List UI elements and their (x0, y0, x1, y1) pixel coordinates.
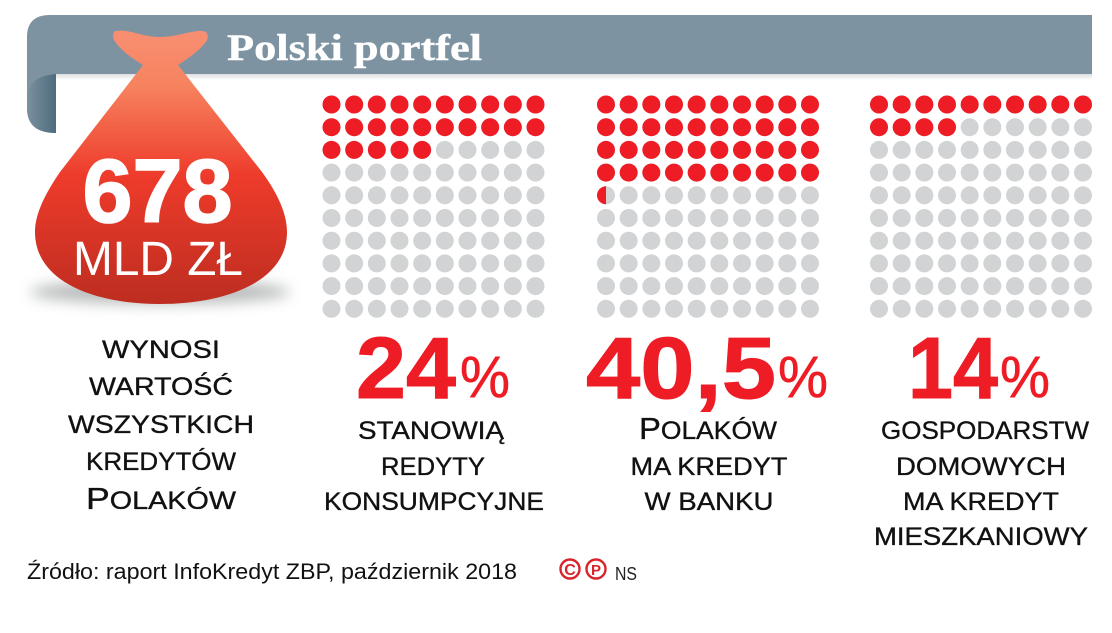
copyright icons (560, 560, 606, 579)
caption 14%: DOMOWYCH (896, 453, 1066, 481)
caption 24% (324, 417, 544, 516)
copyright icons: C (564, 562, 576, 579)
stat 14%: 14 (908, 320, 998, 417)
caption 14% (874, 417, 1089, 551)
money bag (30, 31, 290, 304)
bag unit: MLD ZŁ (73, 233, 243, 286)
stat 24% (356, 320, 510, 417)
stat 14%: % (1000, 345, 1050, 410)
copyright icons: P (591, 562, 601, 579)
source note: Źródło: raport InfoKredyt ZBP, październik 2018 (27, 559, 517, 584)
caption 14%: GOSPODARSTW (881, 417, 1089, 445)
bag amount: 678 (82, 142, 232, 242)
stat 14% (908, 320, 1050, 417)
caption 24%: STANOWIĄ (358, 417, 504, 445)
stat 40,5% (586, 320, 828, 417)
stat 40,5%: 40,5 (586, 320, 776, 417)
stat 24%: % (460, 345, 510, 410)
banner fold (27, 74, 56, 133)
caption 14%: MIESZKANIOWY (874, 523, 1088, 551)
caption 14%: MA KREDYT (903, 488, 1059, 516)
title banner (27, 15, 1092, 133)
caption 40,5%: MA KREDYT (630, 453, 788, 481)
caption 40,5% (630, 411, 788, 516)
bag shadow (30, 280, 290, 304)
left caption: WARTOŚĆ (89, 371, 233, 401)
bag shape (35, 31, 287, 304)
author initials: NS (615, 564, 637, 584)
left caption: WYNOSI (102, 336, 220, 364)
caption 24%: KONSUMPCYJNE (324, 488, 544, 516)
caption 40,5%: POLAKÓW (639, 411, 777, 446)
dot chart: 14% (870, 96, 1092, 318)
stat 24%: 24 (356, 320, 456, 417)
caption 24%: REDYTY (381, 453, 485, 481)
left caption (68, 336, 254, 516)
left caption: WSZYSTKICH (68, 411, 254, 439)
caption 40,5%: W BANKU (644, 488, 774, 516)
left caption: KREDYTÓW (86, 447, 236, 476)
left caption: POLAKÓW (86, 481, 236, 516)
title: Polski portfel (227, 28, 482, 69)
stat 40,5%: % (778, 345, 828, 410)
dot chart: 40,5% (597, 96, 819, 318)
dot chart: 24% (322, 96, 544, 318)
